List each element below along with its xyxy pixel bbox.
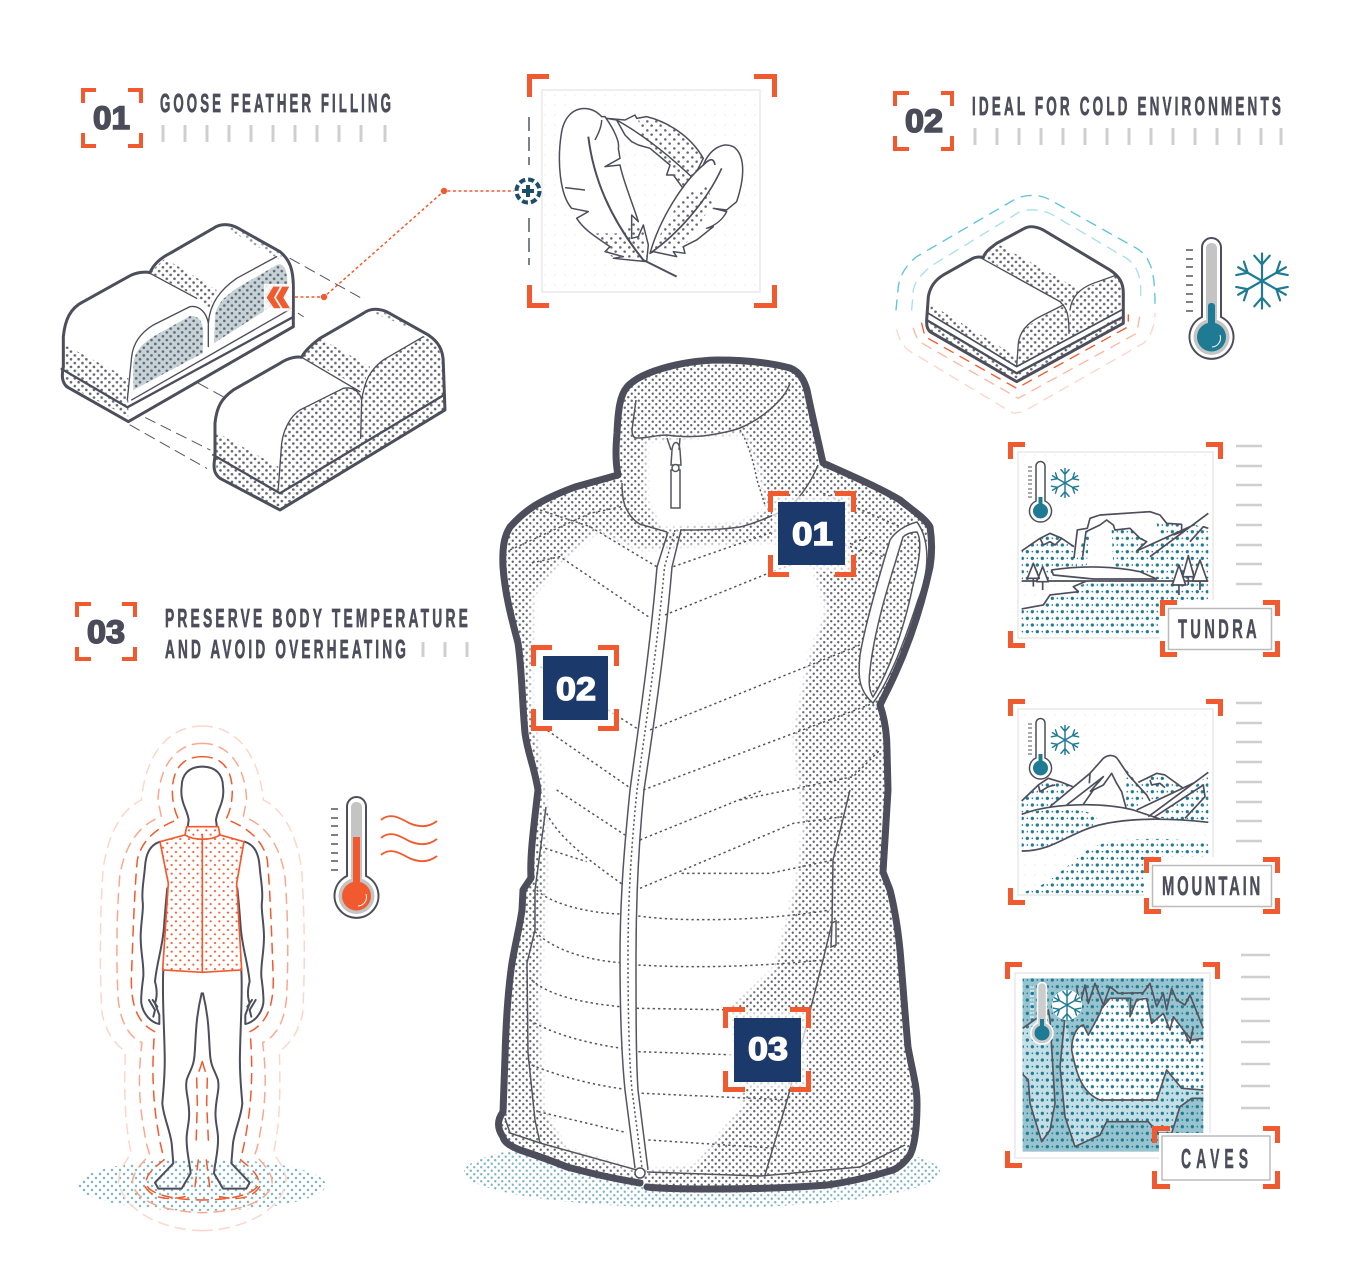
- icon: cold thermometer: [1186, 238, 1234, 359]
- middle feather: [607, 115, 703, 193]
- landscape illustration: [1022, 756, 1208, 893]
- heading line 1: PRESERVE BODY TEMPERATURE: [165, 603, 471, 633]
- ground shadow under vest: [464, 1136, 940, 1208]
- heat halos: [100, 726, 304, 1231]
- panel: insulated block with heat halos: [896, 195, 1155, 413]
- label: [1154, 1128, 1278, 1186]
- tick ruler: [163, 125, 385, 142]
- number 02: 02: [905, 103, 943, 139]
- snowflake small: [1050, 468, 1080, 498]
- frame: [1018, 452, 1213, 638]
- corner brackets: [1008, 964, 1218, 1166]
- panel: caves scene: [1008, 955, 1278, 1186]
- label: CAVES: [1181, 1143, 1253, 1174]
- panel: human figure with heat halos: [78, 726, 326, 1231]
- label: MOUNTAIN: [1162, 871, 1263, 901]
- icon: snowflake: [1234, 254, 1290, 308]
- side seams and hem: [505, 790, 905, 1178]
- corner brackets: [1010, 702, 1220, 902]
- badge 03: 03: [748, 1031, 788, 1067]
- thermometer small: [1028, 718, 1052, 779]
- block: [927, 227, 1123, 382]
- section tag 01: goose feather filling: [83, 88, 394, 146]
- snowflake small with halo: [1052, 990, 1082, 1020]
- armhole band: [859, 522, 927, 703]
- warm halos orange: [897, 313, 1155, 413]
- number bracket 01: [83, 90, 141, 146]
- landscape illustration: [1022, 512, 1208, 633]
- feather frame: [542, 90, 760, 292]
- feathers illustration: [559, 108, 743, 277]
- corner brackets: [1010, 444, 1220, 646]
- closed block: [213, 309, 445, 510]
- icon: heat waves: [381, 816, 437, 861]
- thermometer small: [1028, 462, 1052, 522]
- quilting seams lower: [530, 790, 843, 1148]
- panel: opened quilted block and closed block: [62, 225, 445, 510]
- heading line 2: AND AVOID OVERHEATING: [165, 634, 409, 664]
- badge 02: 02: [556, 671, 596, 707]
- vest body halftone: [490, 350, 930, 1200]
- frame: [1018, 709, 1213, 895]
- cold halos blue: [896, 195, 1155, 310]
- snowflake small: [1050, 726, 1080, 754]
- badge 01: 01: [792, 516, 833, 552]
- number bracket 03: [77, 604, 135, 659]
- vest outline: [498, 360, 932, 1189]
- tick ruler: [975, 128, 1281, 145]
- magnifier icon with dashed guide: [516, 117, 540, 265]
- panel: mountain scene: [1010, 702, 1280, 914]
- label: [1160, 600, 1280, 657]
- tick ruler: [1236, 703, 1262, 841]
- right feather: [650, 145, 743, 257]
- frame: [1015, 973, 1210, 1158]
- tick ruler: [1236, 446, 1262, 584]
- number 01: 01: [93, 100, 130, 136]
- orange vest on figure: [160, 827, 244, 972]
- tick ruler: [423, 642, 467, 657]
- quilt windows: [133, 316, 203, 390]
- section tag 02: ideal for cold environments: [895, 91, 1284, 149]
- zipper: [620, 438, 681, 1170]
- ground shadow: [78, 1159, 326, 1211]
- heading: GOOSE FEATHER FILLING: [160, 88, 394, 118]
- label: [1144, 857, 1280, 914]
- thermometer small: [1030, 982, 1053, 1044]
- badge 03: [726, 1010, 808, 1090]
- left feather: [559, 108, 677, 277]
- panel: tundra scene: [1010, 444, 1280, 657]
- section tag 03: preserve body temperature: [77, 603, 471, 664]
- guide dashes: [80, 258, 362, 468]
- orange chevrons: [264, 284, 292, 311]
- badge 02: [534, 648, 616, 728]
- vest illustration: [490, 350, 932, 1200]
- number 03: 03: [87, 614, 125, 650]
- collar lines: [622, 383, 818, 532]
- tick ruler: [1241, 955, 1270, 1108]
- cave illustration: [1023, 978, 1203, 1152]
- panel: feather detail: [530, 76, 774, 306]
- feather frame brackets: [530, 76, 774, 306]
- quilting seams upper: [510, 493, 900, 800]
- body outline: [141, 767, 264, 1189]
- icon: hot thermometer: [331, 797, 378, 918]
- number bracket 02: [895, 93, 952, 149]
- opened block: [62, 225, 293, 422]
- label: TUNDRA: [1178, 614, 1260, 644]
- badge 01: [770, 494, 854, 574]
- callout: orange leader line with dots: [295, 188, 514, 300]
